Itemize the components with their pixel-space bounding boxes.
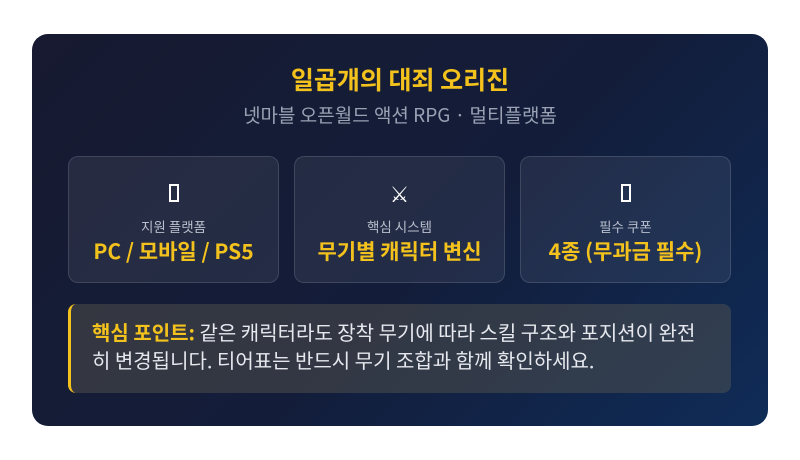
value: 4종 (무과금 필수) [549, 236, 702, 266]
panel: system [294, 156, 505, 283]
value: 무기별 캐릭터 변신 [317, 236, 482, 266]
callout [68, 304, 731, 393]
value: PC / 모바일 / PS5 [93, 236, 254, 266]
card [32, 34, 768, 426]
title: 일곱개의 대죄 오리진 [291, 61, 509, 97]
panel: coupons [520, 156, 731, 283]
label: 지원 플랫폼 [141, 216, 206, 236]
label: 필수 쿠폰 [599, 216, 652, 236]
icon: coupon [621, 184, 631, 202]
panel: platform [68, 156, 279, 283]
icon: swords: ⚔ [390, 177, 409, 209]
label: 핵심 시스템 [367, 216, 432, 236]
icon: device [169, 184, 179, 202]
subtitle: 넷마블 오픈월드 액션 RPG · 멀티플랫폼 [243, 101, 557, 128]
callout: 핵심 포인트: 같은 캐릭터라도 장착 무기에 따라 스킬 구조와 포지션이 완전히 변경됩니다. 티어표는 반드시 무기 조합과 함께 확인하세요. [92, 317, 695, 374]
